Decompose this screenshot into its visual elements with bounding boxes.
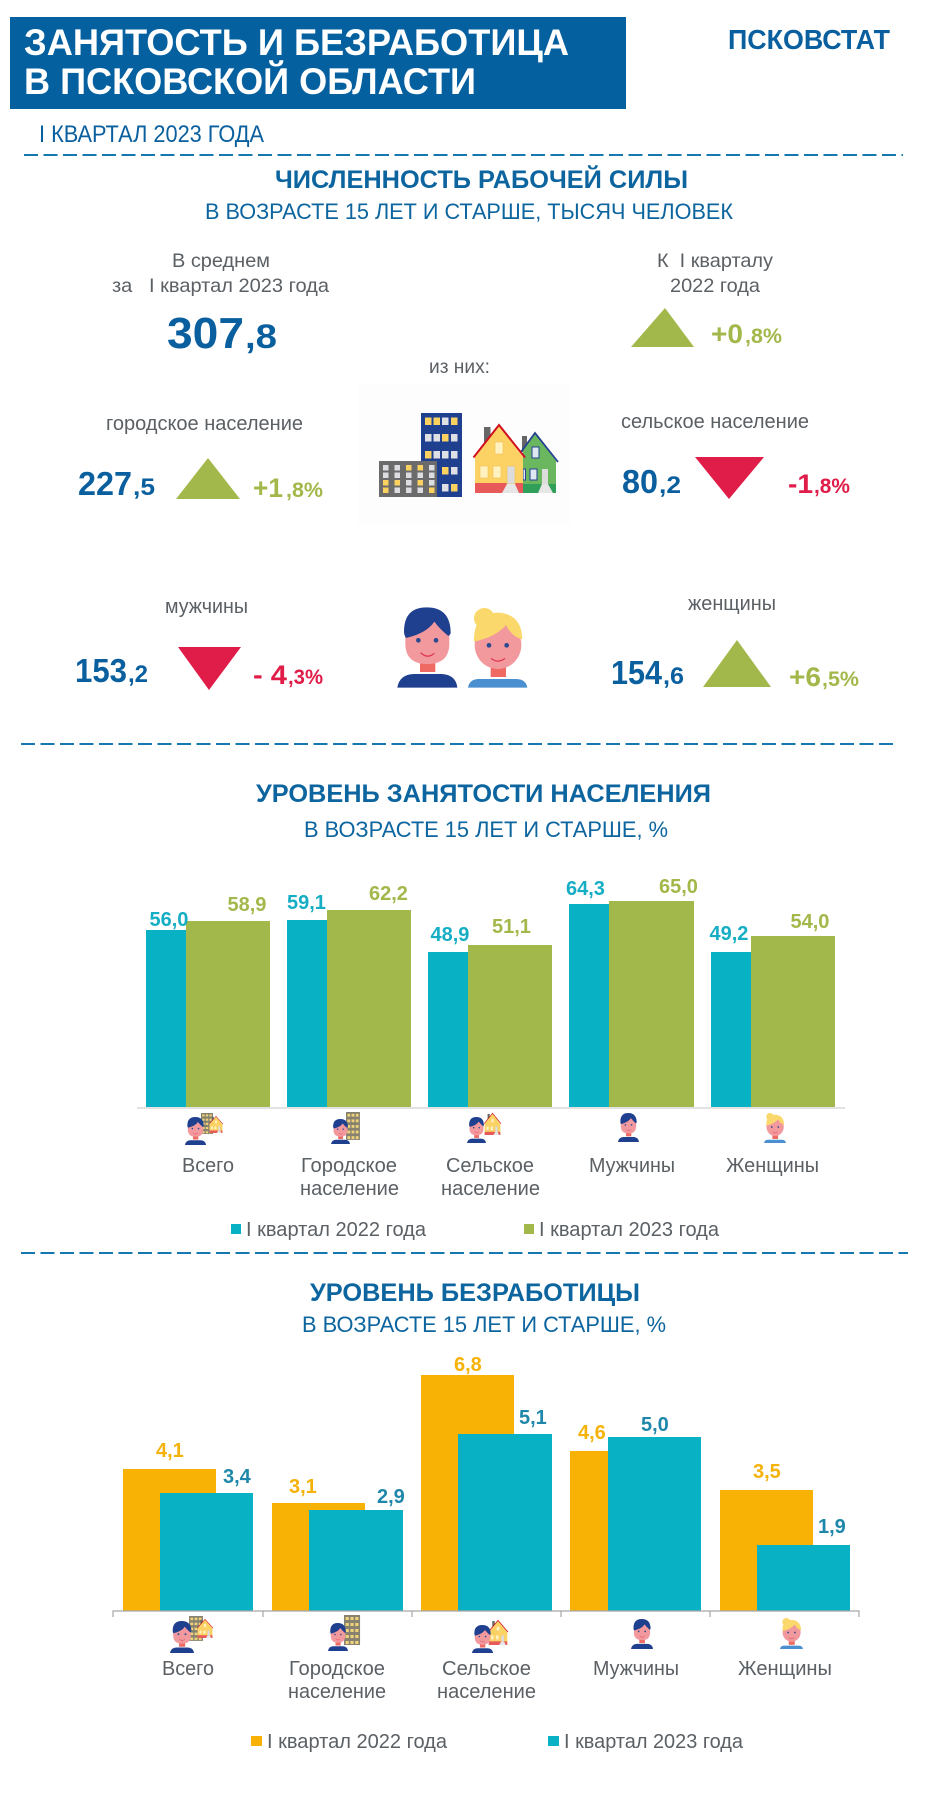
group: men: 4,6 [578,1422,606,1444]
icon: rural [467,1113,501,1143]
stat: women: +6 [789,662,821,692]
category labels: unemployment [162,1658,832,1703]
group: rural [428,916,552,1107]
total value [167,309,277,358]
section heading: employment rate: УРОВЕНЬ ЗАНЯТОСТИ НАСЕЛЕНИЯ [256,780,711,808]
stat: women [611,593,859,692]
group: men [566,876,698,1107]
category labels: unemployment: Всего [162,1658,214,1680]
category labels: employment: население [441,1178,540,1200]
stat: women: женщины [688,593,776,615]
section heading: employment rate: В ВОЗРАСТЕ 15 ЛЕТ И СТАРШЕ, % [304,817,668,842]
title banner: В ПСКОВСКОЙ ОБЛАСТИ [24,60,476,102]
category labels: employment: Городское [301,1155,397,1177]
total change [711,319,782,349]
total value: 307 [167,309,244,358]
year comparison caption [657,250,773,297]
group: total: 3,4 [223,1466,252,1488]
total change: ,8% [745,325,782,348]
group: urban [287,883,411,1107]
stat: urban population: 227 [78,465,132,502]
average total caption: В среднем [172,250,270,272]
section heading: labour force: В ВОЗРАСТЕ 15 ЛЕТ И СТАРШЕ, ТЫСЯЧ ЧЕЛОВЕК [205,199,733,224]
total value: ,8 [245,318,277,356]
icon: buildings and houses [358,385,570,525]
year comparison caption: 2022 года [670,275,760,297]
group: women: 3,5 [753,1461,781,1483]
group: rural: 6,8 [454,1354,482,1376]
section heading: labour force [205,164,733,224]
stat: rural population: -1 [788,469,813,499]
section heading: unemployment rate [302,1279,666,1337]
total change: +0 [711,319,743,349]
stat: rural population: ,8% [814,475,850,498]
legend: unemployment [251,1731,744,1753]
stat: women: 154 [611,654,663,691]
group: total: 58,9 [228,894,266,916]
section heading: unemployment rate: УРОВЕНЬ БЕЗРАБОТИЦЫ [310,1279,640,1307]
icon: women [764,1113,786,1143]
stat: urban population [78,413,323,503]
group: men [570,1414,701,1611]
group: total [146,894,270,1107]
legend: unemployment: I квартал 2023 года [564,1731,744,1753]
average total caption [112,250,329,297]
group: urban: 62,2 [369,883,408,905]
category labels: unemployment: Городское [289,1658,385,1680]
stat: men: 153 [75,652,127,689]
group: women [720,1461,850,1611]
stat: men: мужчины [165,596,248,618]
group: women: 54,0 [790,911,829,933]
icon: total [170,1616,213,1653]
legend: unemployment: I квартал 2022 года [267,1731,448,1753]
category labels: employment: Всего [182,1155,234,1177]
group: rural: 51,1 [492,916,531,938]
legend: employment: I квартал 2022 года [246,1219,427,1241]
group: urban: 3,1 [289,1476,317,1498]
legend: employment [231,1219,720,1241]
bar chart: unemployment rate [113,1354,859,1617]
group: total: 4,1 [156,1440,184,1462]
period label: I КВАРТАЛ 2023 ГОДА [39,121,264,148]
category labels: unemployment: Мужчины [593,1658,679,1680]
icon: men [618,1113,639,1142]
year comparison caption: К I кварталу [657,250,773,272]
group: urban: 59,1 [287,892,326,914]
group: urban [272,1476,405,1611]
publisher name: ПСКОВСТАТ [728,24,890,55]
legend: employment: I квартал 2023 года [539,1219,720,1241]
category labels: employment: Мужчины [589,1155,675,1177]
category labels: employment: Женщины [726,1155,819,1177]
stat: men: ,3% [288,666,323,689]
stat: rural population: 80 [622,463,658,500]
stat: rural population [621,411,850,500]
group: urban: 2,9 [377,1486,405,1508]
group: rural [421,1354,552,1611]
category labels: employment: население [300,1178,399,1200]
category labels: unemployment: население [437,1681,536,1703]
category labels: unemployment: Сельское [442,1658,531,1680]
icon: total [185,1113,223,1145]
stat: men: ,2 [128,661,148,688]
icon: urban [331,1112,360,1144]
group: women: 1,9 [818,1516,846,1538]
stat: urban population: +1 [253,473,283,503]
stat: men [75,596,323,690]
icon: men [631,1619,653,1649]
group: men: 65,0 [659,876,698,898]
group: women: 49,2 [710,923,748,945]
section heading: labour force: ЧИСЛЕННОСТЬ РАБОЧЕЙ СИЛЫ [275,164,688,194]
section heading: employment rate [256,780,711,842]
category labels: employment: Сельское [446,1155,534,1177]
stat: urban population: ,5 [133,474,155,501]
category labels: unemployment: население [288,1681,386,1703]
group: total [123,1440,253,1611]
group: rural: 48,9 [430,924,469,946]
icon: up triangle total [631,308,694,347]
group: total: 56,0 [150,909,188,931]
stat: rural population: ,2 [659,472,681,499]
icon: man and woman [397,607,527,688]
average total caption: за I квартал 2023 года [112,275,329,297]
group: men: 5,0 [641,1414,669,1436]
stat: women: ,5% [822,668,859,691]
group: rural: 5,1 [519,1407,547,1429]
title banner: ЗАНЯТОСТЬ И БЕЗРАБОТИЦА [24,21,569,63]
stat: women: ,6 [663,663,684,690]
icon: urban [328,1615,360,1651]
icon: rural [472,1620,508,1653]
stat: urban population: ,8% [286,479,323,502]
icon: women [780,1618,803,1649]
bar chart: employment rate [137,876,845,1109]
stat: urban population: городское население [106,413,303,435]
section heading: unemployment rate: В ВОЗРАСТЕ 15 ЛЕТ И СТАРШЕ, % [302,1312,666,1337]
of which label: из них: [429,356,490,378]
category labels: unemployment: Женщины [738,1658,832,1680]
title banner [10,17,626,109]
stat: men: - 4 [253,660,287,690]
category labels: employment [182,1155,819,1200]
group: men: 64,3 [566,878,605,900]
stat: rural population: сельское население [621,411,809,433]
group: women [710,911,835,1107]
